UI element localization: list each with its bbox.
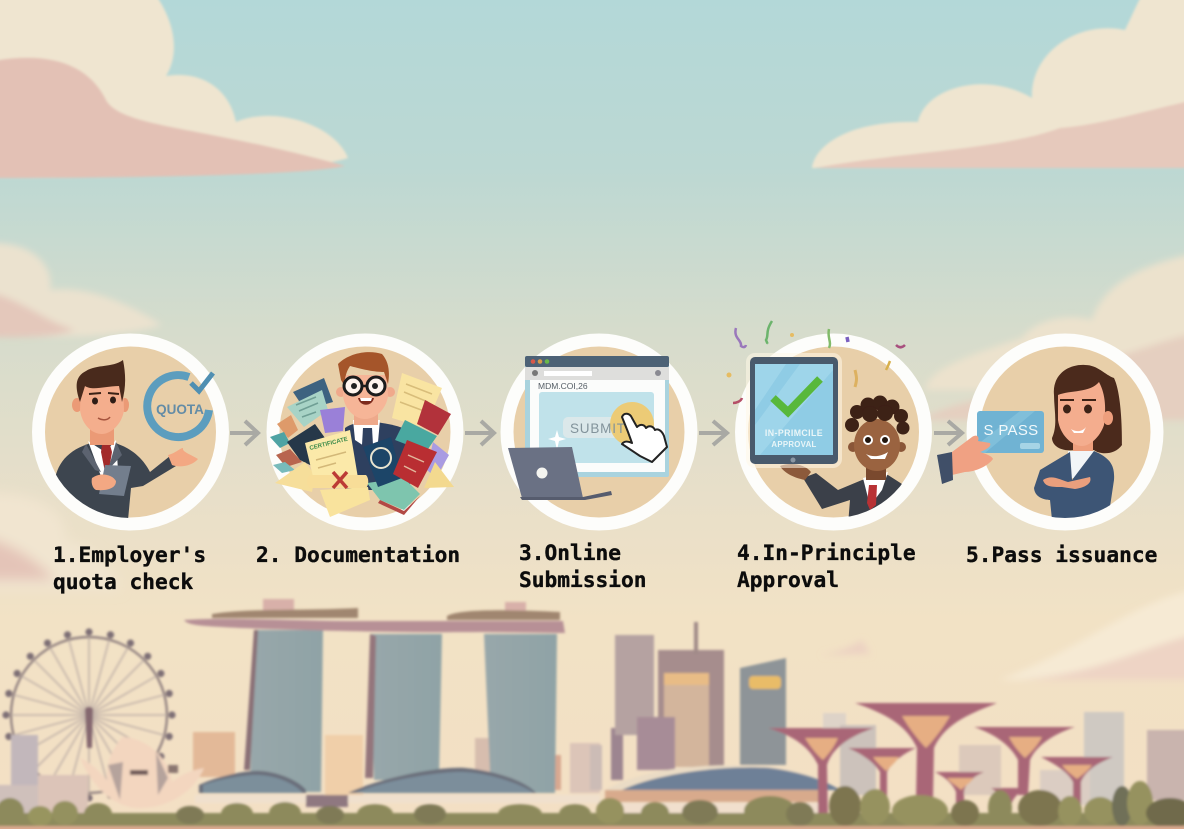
tree line <box>0 781 1184 828</box>
icon: browser window: SUBMIT <box>570 421 626 436</box>
ArtScience Museum <box>80 737 204 808</box>
step 5 circle frame <box>973 340 1157 524</box>
arrow 2 to 3 <box>465 421 494 445</box>
supertree canopies <box>805 716 1092 790</box>
skyline: Singapore landmarks <box>0 599 1184 829</box>
Singapore Flyer wheel <box>2 628 176 802</box>
Marina Bay Sands sky park <box>184 599 565 633</box>
step 2: documentation <box>270 340 457 524</box>
Marina Bay Sands towers <box>244 630 557 793</box>
step 3: online submission <box>507 340 691 524</box>
icon: confetti <box>726 321 905 403</box>
icon: laptop <box>508 447 612 500</box>
icon: browser window <box>525 356 669 477</box>
step 3 circle frame <box>507 340 691 524</box>
clouds: lower left <box>0 493 120 590</box>
arrow 4 to 5 <box>934 421 962 445</box>
clouds: mid right <box>920 250 1184 420</box>
step 2 circle frame <box>273 340 457 524</box>
label: step 3: Submission <box>519 567 647 592</box>
icon: hand giving card <box>937 436 993 484</box>
icon: quota gauge <box>147 373 213 437</box>
domes and promenade <box>195 768 600 807</box>
icon: businessman <box>54 360 198 520</box>
clouds: mid left <box>0 243 162 337</box>
step 1 circle frame <box>38 340 222 524</box>
clouds: top left <box>0 0 348 178</box>
icon: browser window: MDM.COI,26 <box>538 381 588 391</box>
icon: S Pass card <box>977 411 1044 453</box>
icon: man with glasses <box>336 352 413 490</box>
label: step 5: 5.Pass issuance <box>966 542 1157 567</box>
label: step 4: Approval <box>737 567 839 592</box>
Gardens by the Bay supertrees <box>768 703 1113 824</box>
label: step 2: 2. Documentation <box>256 542 460 567</box>
clouds: lower right <box>821 585 1184 680</box>
stadium dome <box>605 765 840 814</box>
icon: documents pile: CERTIFICATE <box>309 437 349 452</box>
step 4: in-principle approval <box>726 321 926 525</box>
step 1: employer's quota check <box>38 340 222 524</box>
arrow 1 to 2 <box>230 421 258 445</box>
icon: quota gauge: QUOTA <box>156 402 204 417</box>
label: step 4: 4.In-Principle <box>737 540 916 565</box>
icon: tablet with check: APPROVAL <box>771 440 817 449</box>
arrow 3 to 4 <box>699 421 727 445</box>
label: step 3: 3.Online <box>519 540 621 565</box>
clouds: top right <box>812 0 1184 168</box>
icon: smiling man <box>780 396 910 525</box>
city towers <box>590 622 1184 805</box>
label: step 1: quota check <box>53 569 194 594</box>
icon: tablet with check <box>746 353 842 468</box>
icon: tablet with check: IN-PRIMCILE <box>765 428 823 438</box>
step 4 circle frame <box>742 340 926 524</box>
ground edge <box>0 826 1184 829</box>
icon: S Pass card: S PASS <box>984 422 1038 439</box>
distant buildings left <box>0 732 600 820</box>
icon: documents pile <box>270 373 454 517</box>
label: step 1: 1.Employer's <box>53 542 206 567</box>
step 5: pass issuance <box>937 340 1157 524</box>
icon: businesswoman <box>1034 365 1122 520</box>
